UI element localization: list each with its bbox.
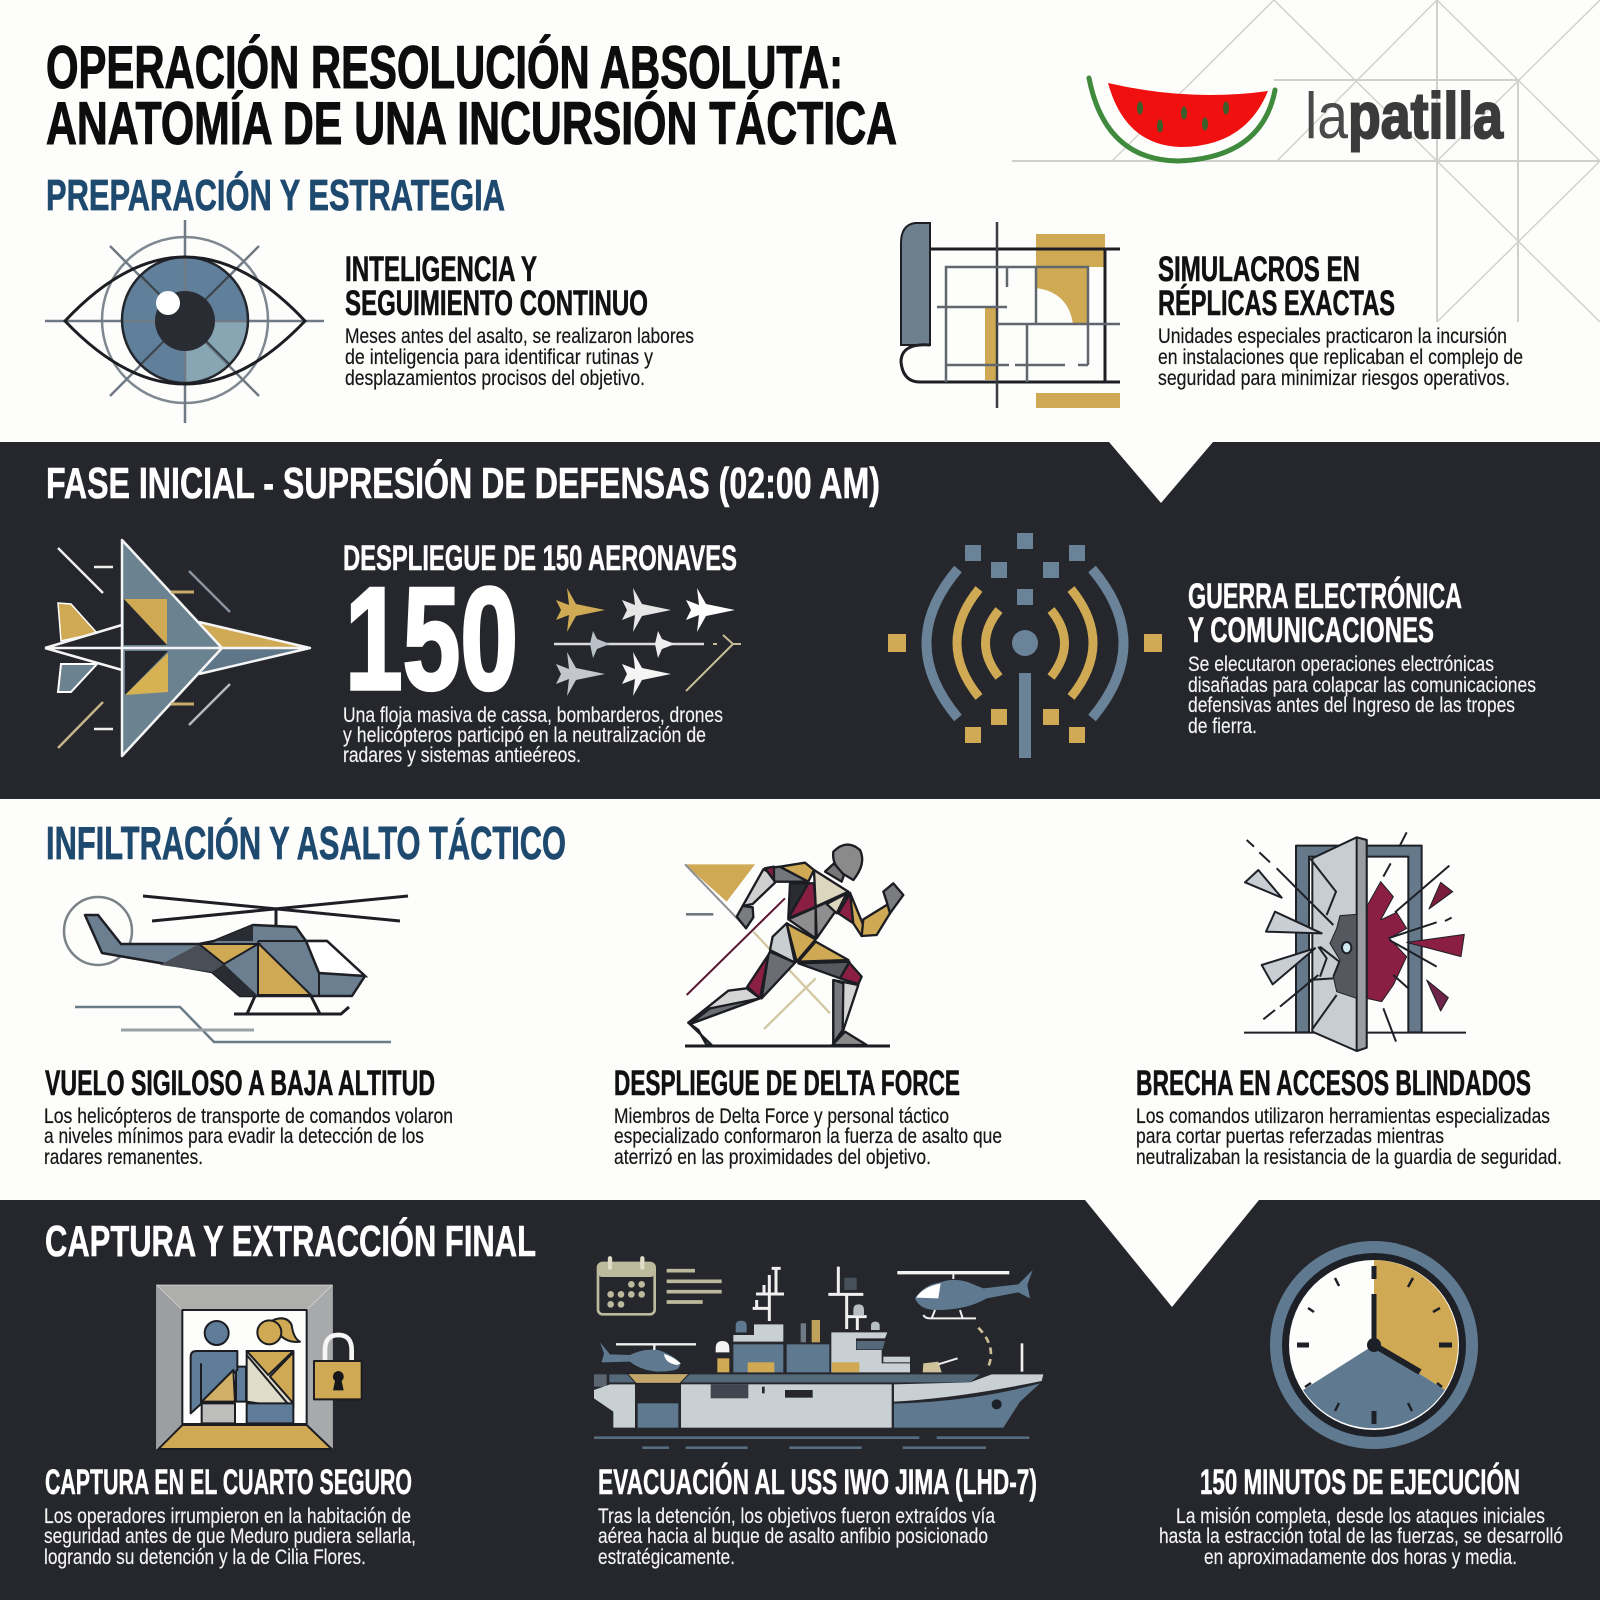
icon: breached door [1244, 832, 1466, 1051]
text block: delta force: especializado conformaron la fuerza de asalto que [614, 1124, 1002, 1148]
text block: simulacros: Unidades especiales practicaron la incursión [1158, 324, 1507, 348]
text block: guerra electrónica: Se elecutaron operaciones electrónicas [1188, 652, 1494, 676]
text block: guerra electrónica: defensivas antes del Ingreso de las tropes [1188, 693, 1515, 717]
icon: aircraft formation [554, 588, 741, 696]
text block: brecha [1136, 1064, 1562, 1169]
text block: delta force: Miembros de Delta Force y personal táctico [614, 1104, 949, 1128]
icon: amphibious ship [594, 1267, 1043, 1448]
text block: evacuación: estratégicamente. [598, 1545, 735, 1569]
text block: guerra electrónica: Y COMUNICACIONES [1188, 611, 1434, 650]
text block: despliegue 150 aeronaves: 150 [345, 557, 518, 720]
text block: guerra electrónica: GUERRA ELECTRÓNICA [1188, 576, 1462, 616]
text block: inteligencia: desplazamientos procisos del objetivo. [345, 366, 645, 390]
text block: vuelo sigiloso [44, 1064, 453, 1169]
text block: brecha: para cortar puertas referzadas mientras [1136, 1124, 1444, 1148]
text block: captura cuarto seguro: logrando su detención y la de Cilia Flores. [44, 1545, 366, 1569]
text block: vuelo sigiloso: VUELO SIGILOSO A BAJA ALTITUD [45, 1064, 435, 1103]
text block: despliegue 150 aeronaves: radares y sistemas antieéreos. [343, 743, 581, 767]
section heading: fase inicial: FASE INICIAL - SUPRESIÓN DE DEFENSAS (02:00 AM) [46, 458, 880, 508]
icon: clock [1270, 1241, 1478, 1449]
text block: captura cuarto seguro [44, 1463, 416, 1569]
text block: guerra electrónica [1188, 576, 1536, 738]
text block: guerra electrónica: de fierra. [1188, 714, 1257, 738]
icon: helicopter [64, 896, 408, 1042]
panel: captura band [0, 1200, 1600, 1600]
section heading: captura: CAPTURA Y EXTRACCIÓN FINAL [45, 1216, 536, 1266]
text block: simulacros: RÉPLICAS EXACTAS [1158, 283, 1395, 323]
icon: blueprint [901, 222, 1120, 408]
text block: captura cuarto seguro: seguridad antes de que Meduro pudiera sellarla, [44, 1524, 416, 1548]
text block: captura cuarto seguro: Los operadores irrumpieron en la habitación de [44, 1504, 411, 1528]
text block: inteligencia: SEGUIMIENTO CONTINUO [345, 284, 648, 323]
text block: evacuación: EVACUACIÓN AL USS IWO JIMA (LHD-7) [598, 1462, 1037, 1502]
title: OPERACIÓN RESOLUCIÓN ABSOLUTA: [46, 34, 843, 101]
text block: 150 minutos: en aproximadamente dos horas y media. [1204, 1545, 1517, 1569]
icon: calendar [598, 1258, 722, 1314]
text block: despliegue 150 aeronaves: y helicópteros participó en la neutralización de [343, 723, 706, 747]
panel: fase inicial band [0, 442, 1600, 799]
text block: inteligencia: Meses antes del asalto, se realizaron labores [345, 324, 694, 348]
logo: lapatilla: patilla [1348, 79, 1504, 152]
icon: eye [45, 220, 324, 423]
section heading: infiltración: INFILTRACIÓN Y ASALTO TÁCTICO [46, 817, 566, 869]
text block: evacuación [598, 1462, 1037, 1569]
text block: 150 minutos [1159, 1462, 1563, 1569]
section heading: preparación: PREPARACIÓN Y ESTRATEGIA [46, 170, 505, 220]
text block: evacuación: Tras la detención, los objetivos fueron extraídos vía [598, 1504, 995, 1528]
icon: safe room and padlock [157, 1285, 362, 1449]
icon: running soldier [685, 845, 903, 1046]
text block: despliegue 150 aeronaves [343, 539, 737, 767]
text block: despliegue 150 aeronaves: Una floja masiva de cassa, bombarderos, drones [343, 703, 723, 727]
text block: delta force: aterrizó en las proximidades del objetivo. [614, 1145, 931, 1169]
text block: vuelo sigiloso: radares remanentes. [44, 1145, 203, 1169]
logo: lapatilla: la [1305, 79, 1349, 152]
text block: simulacros [1158, 250, 1523, 390]
text block: captura cuarto seguro: CAPTURA EN EL CUARTO SEGURO [45, 1463, 412, 1502]
text block: simulacros: seguridad para minimizar riesgos operativos. [1158, 366, 1510, 390]
text block: inteligencia: INTELIGENCIA Y [345, 250, 537, 289]
icon: fighter jet [45, 540, 310, 756]
text block: inteligencia [345, 250, 694, 390]
title: ANATOMÍA DE UNA INCURSIÓN TÁCTICA [46, 90, 897, 157]
text block: delta force: DESPLIEGUE DE DELTA FORCE [614, 1064, 960, 1103]
text block: delta force [614, 1064, 1002, 1169]
text block: simulacros: en instalaciones que replicaban el complejo de [1158, 345, 1523, 369]
text block: evacuación: aérea hacia al buque de asalto anfibio posicionado [598, 1524, 988, 1548]
text block: vuelo sigiloso: Los helicópteros de transporte de comandos volaron [44, 1104, 453, 1128]
text block: simulacros: SIMULACROS EN [1158, 250, 1360, 289]
title [46, 34, 897, 157]
text block: despliegue 150 aeronaves: DESPLIEGUE DE 150 AERONAVES [343, 539, 737, 578]
logo: lapatilla [1089, 78, 1504, 161]
text block: vuelo sigiloso: a niveles mínimos para evadir la detección de los [44, 1124, 424, 1148]
text block: inteligencia: de inteligencia para identificar rutinas y [345, 345, 653, 369]
icon: electronic signal [888, 533, 1162, 758]
